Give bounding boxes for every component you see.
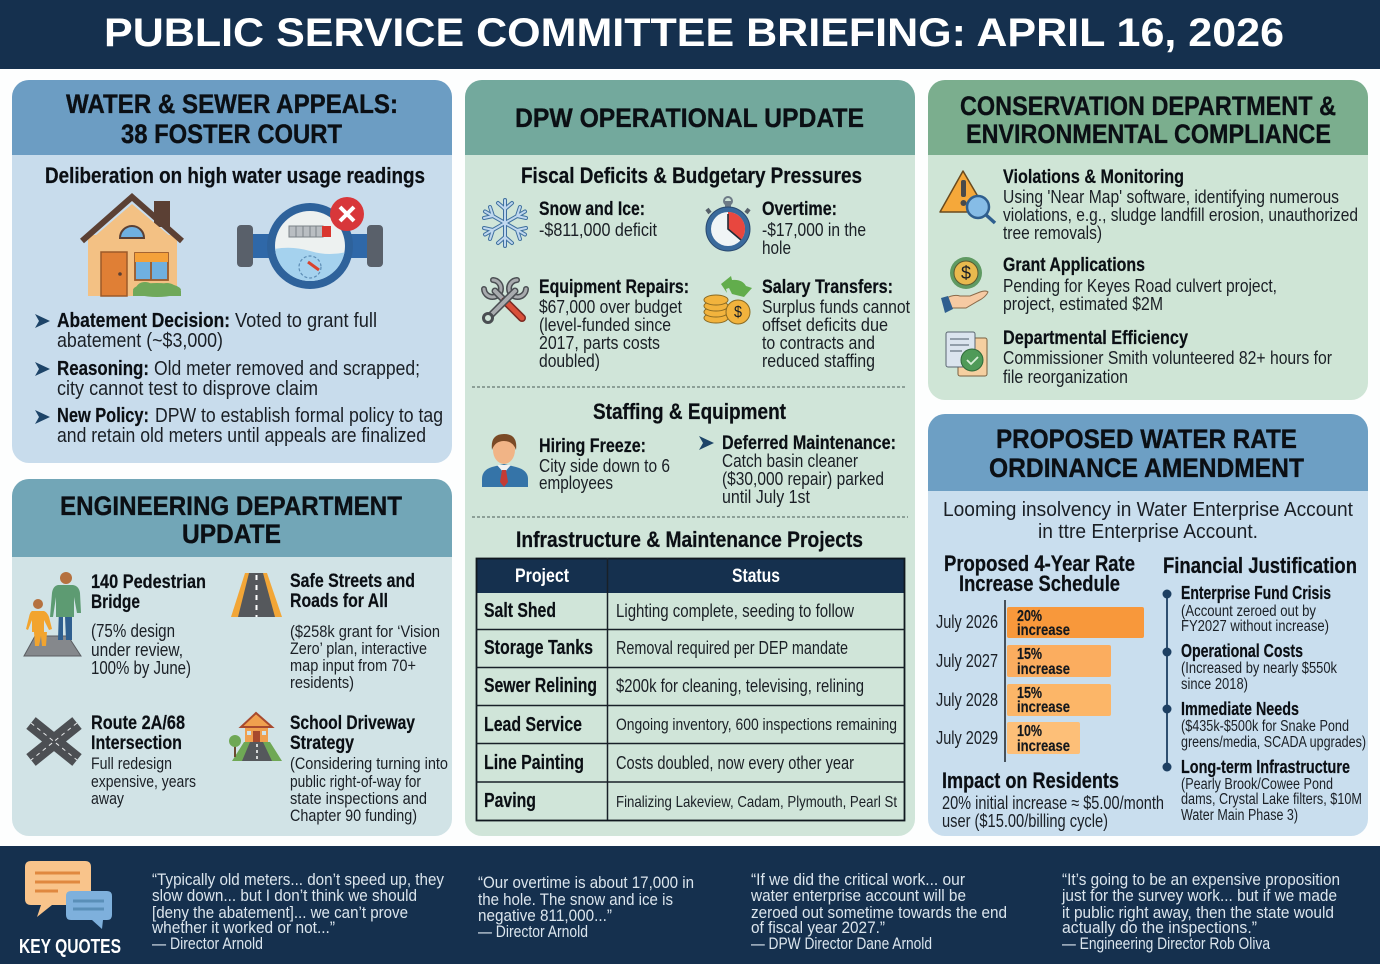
table: projects and status: Paving	[484, 790, 536, 812]
chart heading: rate schedule	[944, 551, 1135, 596]
text: equipment repairs: (level-funded since	[539, 315, 671, 335]
subheading: deliberation: Deliberation on high water usage readings	[45, 163, 425, 188]
icon: warning with magnifier	[940, 171, 995, 223]
heading: engineering department	[60, 491, 402, 549]
footer: key quotes band	[0, 846, 1380, 964]
text: 140 pedestrian bridge: Bridge	[91, 592, 140, 613]
panel: proposed water rate ordinance	[928, 414, 1368, 836]
text: route 2a/68 intersection: expensive, years	[91, 772, 196, 791]
heading: conservation department: ENVIRONMENTAL COMPLIANCE	[966, 119, 1331, 149]
quote: survey work: — Engineering Director Rob Oliva	[1062, 934, 1270, 953]
bar: july 2027: 15%	[1017, 646, 1042, 663]
quote: overtime: negative 811,000...”	[478, 906, 612, 925]
icon: road	[231, 573, 282, 617]
icon: house	[82, 197, 182, 297]
panel: engineering department update	[12, 479, 452, 836]
text: insolvency summary: Looming insolvency in Water Enterprise Account	[943, 499, 1353, 521]
text: route 2a/68 intersection: away	[91, 789, 124, 808]
text: route 2a/68 intersection: Intersection	[91, 733, 182, 754]
table: projects and status: Project	[515, 566, 570, 587]
icon: pedestrians on bridge	[24, 572, 81, 656]
subheading: fiscal deficits: Fiscal Deficits & Budgetary Pressures	[521, 163, 862, 188]
text: grant applications: Grant Applications	[1003, 255, 1145, 276]
quote: old meters: — Director Arnold	[152, 934, 263, 953]
bullet: abatement decision: Voted to grant full	[235, 310, 377, 332]
quote: survey work: it public right away, then the state would	[1062, 903, 1334, 922]
text: 140 pedestrian bridge: 100% by June)	[91, 658, 191, 678]
text: route 2a/68 intersection	[91, 713, 196, 808]
text: equipment repairs	[539, 277, 689, 371]
text: impact on residents	[942, 768, 1164, 831]
text: salary transfers	[762, 277, 910, 371]
text: school driveway strategy: Strategy	[290, 733, 354, 754]
icon: hand with coin: $	[961, 263, 971, 283]
bar: july 2027	[936, 645, 1111, 678]
quote: old meters	[151, 870, 444, 953]
bullet: reasoning: city cannot test to disprove claim	[57, 378, 318, 400]
item: enterprise fund crisis: (Account zeroed out by	[1181, 603, 1316, 620]
chart heading: rate schedule: Proposed 4-Year Rate	[944, 551, 1135, 576]
bullet: reasoning: Reasoning:	[57, 358, 149, 380]
bullet: reasoning	[35, 358, 420, 400]
bullet: new policy	[35, 405, 443, 447]
icon: speech bubbles	[25, 861, 112, 929]
text: grant applications: project, estimated $2M	[1003, 294, 1163, 314]
title banner	[0, 0, 1380, 69]
item: enterprise fund crisis: FY2027 without increase)	[1181, 618, 1329, 635]
quote: overtime: “Our overtime is about 17,000 in	[478, 873, 694, 892]
bullet: new policy: and retain old meters until appeals are finalized	[57, 425, 426, 447]
table: projects and status: Salt Shed	[484, 600, 556, 622]
quote: critical work: zeroed out sometime towards the end	[751, 903, 1007, 922]
text: grant applications	[1003, 255, 1277, 314]
heading: water and sewer appeals: WATER & SEWER APPEALS:	[66, 89, 398, 119]
text: safe streets and roads: ($258k grant for ‘Vision	[290, 622, 440, 641]
bar: july 2029: 10%	[1017, 723, 1042, 740]
icon: coins and money arrow: $	[734, 304, 742, 321]
heading: engineering department: ENGINEERING DEPARTMENT	[60, 491, 402, 521]
bar: july 2028: increase	[1017, 699, 1070, 716]
text: equipment repairs: doubled)	[539, 351, 600, 371]
text: safe streets and roads: map input from 70+	[290, 656, 416, 675]
item: immediate needs: Immediate Needs	[1181, 699, 1299, 719]
table: projects and status: Lighting complete, seeding to follow	[616, 601, 855, 621]
text: hiring freeze	[539, 436, 670, 493]
bar: july 2029: increase	[1017, 738, 1070, 755]
heading: engineering department: UPDATE	[182, 519, 281, 549]
text: route 2a/68 intersection: Full redesign	[91, 754, 172, 773]
icon: water meter	[237, 197, 383, 290]
quote: critical work	[750, 870, 1007, 953]
bullet: abatement decision: abatement (~$3,000)	[57, 330, 223, 352]
bullet: abatement decision: Abatement Decision:	[57, 310, 230, 332]
text: overtime: -$17,000 in the	[762, 220, 866, 240]
text: school driveway strategy	[290, 713, 448, 825]
bar: july 2027: increase	[1017, 661, 1070, 678]
quote: survey work	[1061, 870, 1340, 953]
heading: proposed water rate: PROPOSED WATER RATE	[996, 424, 1297, 454]
bar: july 2026: July 2026	[936, 612, 998, 632]
text: safe streets and roads: residents)	[290, 673, 354, 692]
text: departmental efficiency: Commissioner Smith volunteered 82+ hours for	[1003, 348, 1332, 368]
quote: critical work: — DPW Director Dane Arnold	[751, 934, 932, 953]
quote: critical work: of fiscal year 2027.”	[751, 918, 885, 937]
text: school driveway strategy: (Considering turning into	[290, 754, 448, 773]
table: projects and status: Status	[732, 566, 780, 587]
item: enterprise fund crisis	[1181, 583, 1331, 635]
bar chart: rate increases	[936, 600, 1144, 762]
text: deferred maintenance: ($30,000 repair) parked	[722, 469, 884, 489]
heading: conservation department	[960, 91, 1336, 149]
text: impact on residents: Impact on Residents	[942, 768, 1119, 793]
subheading: infrastructure projects: Infrastructure & Maintenance Projects	[516, 527, 863, 552]
table: projects and status: Line Painting	[484, 752, 584, 774]
text: deferred maintenance: Deferred Maintenance:	[722, 433, 896, 454]
text: violations and monitoring: tree removals)	[1003, 223, 1102, 243]
text: equipment repairs: 2017, parts costs	[539, 333, 660, 353]
text: deferred maintenance: Catch basin cleaner	[722, 451, 858, 471]
bar: july 2028: 15%	[1017, 685, 1042, 702]
quote: survey work: actually do the inspections.”	[1062, 918, 1257, 937]
text: snow and ice: Snow and Ice:	[539, 199, 645, 220]
text: 140 pedestrian bridge	[91, 572, 206, 678]
text: overtime: Overtime:	[762, 199, 837, 220]
icon: snowflake	[484, 200, 526, 246]
timeline: justification items	[1162, 583, 1366, 824]
quote: survey work: just for the survey work... but if we made	[1061, 886, 1337, 905]
title banner: PUBLIC SERVICE COMMITTEE BRIEFING: APRIL 16, 2026	[104, 11, 1284, 55]
icon: school building	[229, 713, 282, 761]
text: route 2a/68 intersection: Route 2A/68	[91, 713, 185, 734]
text: deferred maintenance	[699, 433, 896, 507]
text: insolvency summary: in ttre Enterprise Account.	[1038, 521, 1258, 543]
heading: dpw operational update: DPW OPERATIONAL UPDATE	[515, 103, 864, 133]
text: equipment repairs: $67,000 over budget	[539, 297, 682, 317]
panel: water and sewer appeals	[12, 80, 452, 463]
bullet: reasoning: Old meter removed and scrapped;	[154, 358, 420, 380]
text: school driveway strategy: state inspections and	[290, 789, 427, 808]
panel: dpw operational update	[465, 80, 915, 836]
text: salary transfers: to contracts and	[762, 333, 875, 353]
quote: overtime	[478, 873, 694, 941]
bar: july 2028: July 2028	[936, 690, 998, 710]
text: safe streets and roads: Zero’ plan, interactive	[290, 639, 427, 658]
icon: hand with coin	[941, 257, 988, 313]
text: school driveway strategy: public right-of-way for	[290, 772, 421, 791]
text: school driveway strategy: Chapter 90 funding)	[290, 806, 417, 825]
text: safe streets and roads: Safe Streets and	[290, 571, 415, 592]
text: 140 pedestrian bridge: 140 Pedestrian	[91, 572, 206, 593]
quote: critical work: water enterprise account will be	[750, 886, 966, 905]
table: projects and status: Finalizing Lakeview, Cadam, Plymouth, Pearl St	[616, 794, 897, 811]
icon: stopwatch	[706, 197, 750, 251]
icon: coins and money arrow	[704, 276, 752, 324]
bar: july 2026: increase	[1017, 622, 1070, 639]
icon: crossed wrenches	[484, 280, 526, 322]
quote: old meters: “Typically old meters... don’t speed up, they	[152, 870, 444, 889]
text: salary transfers: Surplus funds cannot	[762, 297, 910, 317]
item: operational costs: Operational Costs	[1181, 641, 1303, 661]
text: 140 pedestrian bridge: under review,	[91, 640, 183, 660]
text: departmental efficiency: Departmental Efficiency	[1003, 328, 1188, 349]
item: operational costs: since 2018)	[1181, 676, 1248, 693]
bar: july 2027: July 2027	[936, 651, 998, 671]
table: projects and status: Storage Tanks	[484, 637, 593, 659]
table: projects and status: $200k for cleaning, televising, relining	[616, 676, 864, 696]
icon: person	[482, 434, 528, 487]
bar: july 2028	[936, 684, 1111, 716]
text: insolvency summary	[943, 499, 1353, 543]
table: projects and status	[476, 558, 905, 820]
icon: intersection	[31, 723, 77, 760]
text: deferred maintenance: until July 1st	[722, 487, 810, 507]
heading: water and sewer appeals	[66, 89, 398, 149]
text: equipment repairs: Equipment Repairs:	[539, 277, 689, 298]
text: violations and monitoring: Violations & Monitoring	[1003, 167, 1184, 188]
table: projects and status: Ongoing inventory, 600 inspections remaining	[616, 715, 897, 734]
heading: water and sewer appeals: 38 FOSTER COURT	[121, 119, 342, 149]
quote: overtime: — Director Arnold	[478, 922, 588, 941]
bullet: abatement decision	[35, 310, 377, 352]
quote: old meters: [deny the abatement]... we can’t prove	[152, 903, 408, 922]
item: immediate needs	[1181, 699, 1366, 751]
bar: july 2029: July 2029	[936, 728, 998, 748]
quote: overtime: the hole. The snow and ice is	[478, 890, 673, 909]
text: grant applications: Pending for Keyes Road culvert project,	[1003, 276, 1277, 296]
text: violations and monitoring	[1003, 167, 1358, 243]
bullet: new policy: New Policy:	[57, 405, 149, 427]
text: hiring freeze: employees	[539, 473, 613, 493]
table: projects and status: Lead Service	[484, 714, 582, 736]
bar: july 2026: 20%	[1017, 608, 1042, 625]
label: key quotes: KEY QUOTES	[19, 935, 121, 958]
text: overtime	[762, 199, 866, 258]
text: salary transfers: reduced staffing	[762, 351, 875, 371]
item: long-term infrastructure: (Pearly Brook/Cowee Pond	[1181, 776, 1333, 793]
text: salary transfers: offset deficits due	[762, 315, 888, 335]
text: impact on residents: user ($15.00/billing cycle)	[942, 811, 1108, 831]
item: long-term infrastructure	[1181, 757, 1362, 824]
item: long-term infrastructure: Water Main Phase 3)	[1181, 807, 1298, 824]
table: projects and status: Removal required per DEP mandate	[616, 638, 848, 658]
text: snow and ice	[539, 199, 657, 240]
panel: conservation department	[928, 80, 1368, 400]
text: school driveway strategy: School Driveway	[290, 713, 415, 734]
item: enterprise fund crisis: Enterprise Fund Crisis	[1181, 583, 1331, 603]
heading: proposed water rate: ORDINANCE AMENDMENT	[989, 453, 1304, 483]
chart heading: rate schedule: Increase Schedule	[959, 571, 1120, 596]
text: safe streets and roads: Roads for All	[290, 591, 388, 612]
quote: old meters: whether it worked or not...”	[151, 918, 335, 937]
table: projects and status: Sewer Relining	[484, 675, 597, 697]
subheading: staffing and equipment: Staffing & Equipment	[593, 399, 787, 424]
quote: old meters: slow down... but I don’t think we should	[152, 886, 417, 905]
text: safe streets and roads	[290, 571, 440, 692]
text: hiring freeze: City side down to 6	[539, 456, 670, 476]
item: operational costs	[1181, 641, 1337, 693]
bar: july 2029	[936, 722, 1080, 755]
quote: critical work: “If we did the critical work... our	[751, 870, 965, 889]
text: 140 pedestrian bridge: (75% design	[91, 621, 175, 641]
text: overtime: hole	[762, 238, 791, 258]
text: salary transfers: Salary Transfers:	[762, 277, 893, 298]
text: departmental efficiency: file reorganization	[1003, 367, 1128, 387]
icon: documents with check	[946, 332, 987, 376]
table: projects and status: Costs doubled, now every other year	[616, 753, 854, 773]
text: departmental efficiency	[1003, 328, 1332, 387]
text: impact on residents: 20% initial increase ≈ $5.00/month	[942, 793, 1164, 813]
quote: survey work: “It’s going to be an expensive proposition	[1062, 870, 1340, 889]
bullet: new policy: DPW to establish formal policy to tag	[155, 405, 443, 427]
text: violations and monitoring: Using 'Near Map' software, identifying numerous	[1003, 187, 1339, 207]
text: hiring freeze: Hiring Freeze:	[539, 436, 646, 457]
bar: july 2026	[936, 607, 1144, 639]
heading: proposed water rate	[989, 424, 1304, 483]
text: snow and ice: -$811,000 deficit	[539, 220, 657, 240]
item: operational costs: (Increased by nearly $550k	[1181, 660, 1337, 677]
